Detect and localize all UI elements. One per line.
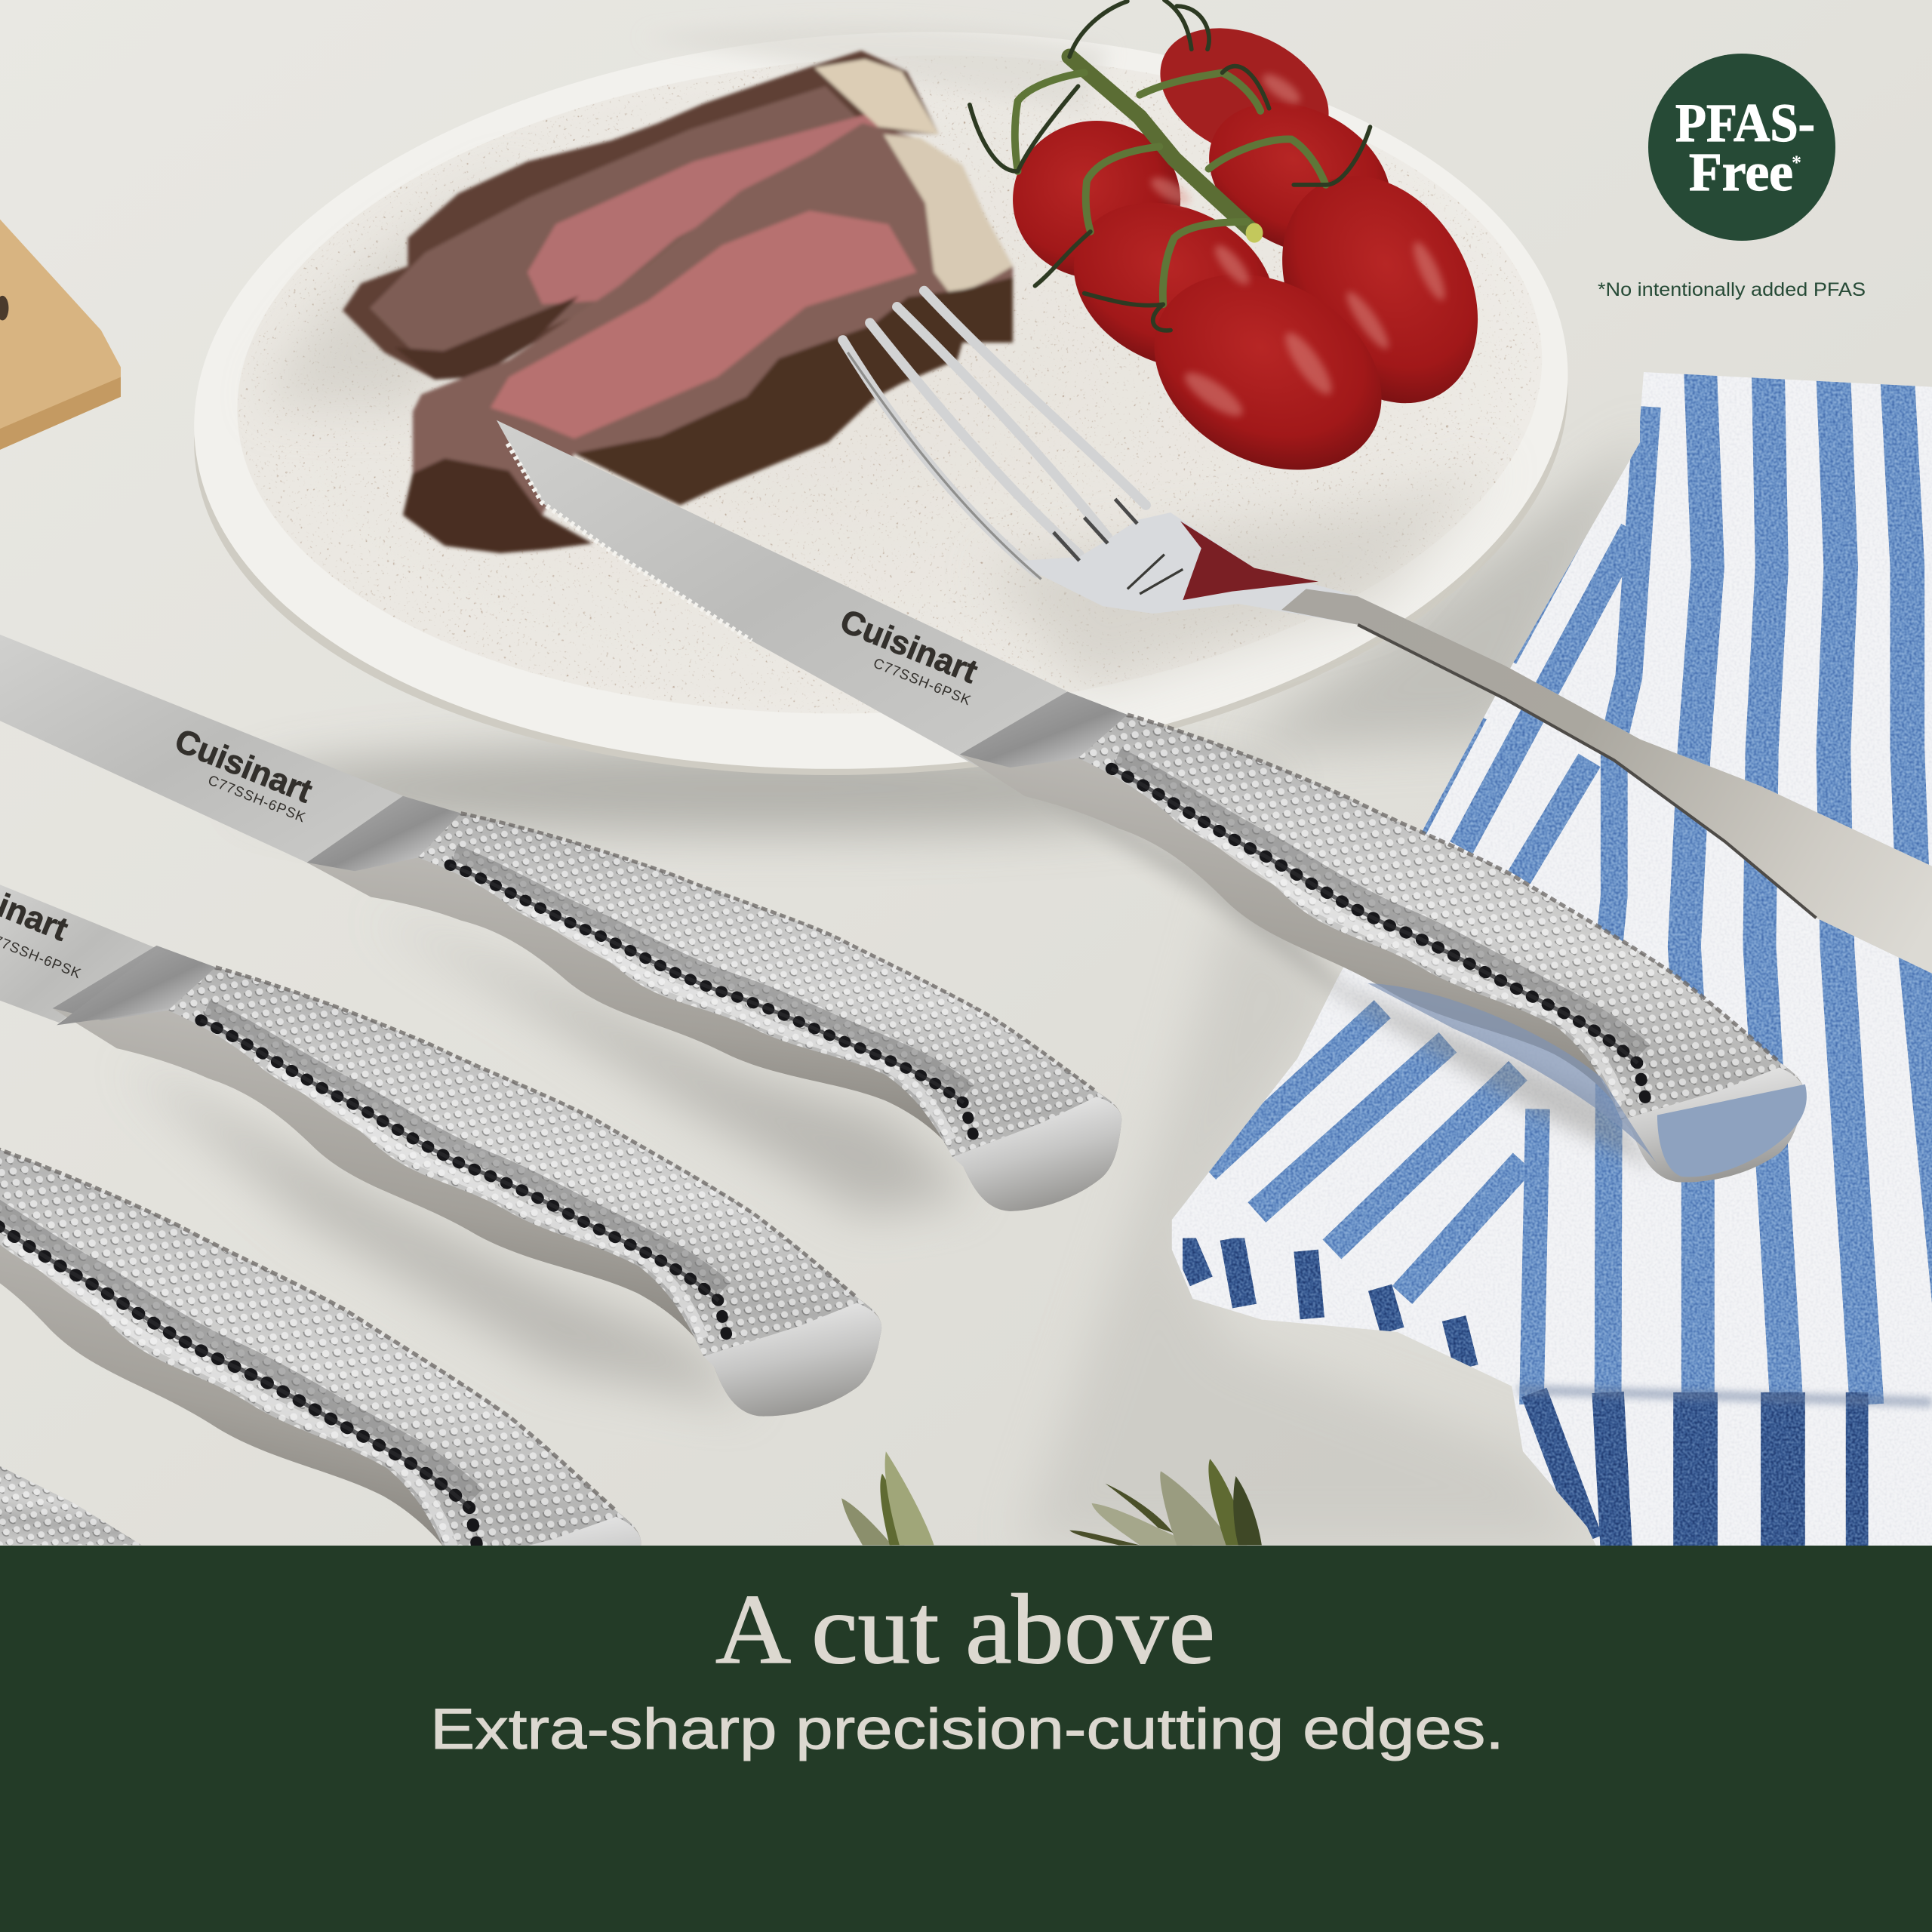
fork head and handle [1023,512,1932,974]
knife shadow [1035,789,1657,1171]
steak slices [343,51,1013,553]
rosemary sprigs [841,1451,1262,1545]
second knife [0,635,1121,1211]
badge text: Free [1689,142,1793,202]
handle [29,940,903,1423]
product photo scene [0,0,1932,1546]
title: A cut above [715,1574,1215,1684]
upper steak slice [343,51,939,380]
third knife [0,884,903,1423]
plate [175,0,1587,809]
towel dark lower fold stripes [1183,1238,1868,1552]
towel stripes [1208,370,1932,1404]
brand marking: Cuisinart [170,721,318,811]
lower steak slice [403,123,1013,553]
badge text [1675,93,1815,202]
brand marking: C77SSH-6PSK [206,772,309,826]
towel reflection on handle [1367,983,1657,1164]
fork [843,291,1932,974]
brand marking: Cuisinart [835,602,983,691]
tomato highlights [1147,69,1451,423]
knife on plate [497,420,1831,1191]
tomatoes on the vine [970,0,1517,509]
blade [0,884,158,1023]
bamboo block [0,220,121,450]
towel [1158,357,1932,1552]
fifth knife handle [0,1466,142,1545]
badge text: * [1792,152,1801,174]
fork tines [843,291,1146,573]
handle [931,684,1831,1191]
PFAS footnote: *No intentionally added PFAS [1598,279,1866,300]
brand marking: C77SSH-6PSK [871,655,974,709]
footer band [0,1546,1932,1932]
table shadows [123,431,1657,1545]
fork reflection [1180,521,1318,600]
subtitle: Extra-sharp precision-cutting edges. [430,1697,1504,1761]
badge text: PFAS- [1675,93,1815,153]
handle [307,796,1121,1211]
fourth knife handle [0,1097,678,1645]
vine [1069,57,1253,232]
PFAS-free badge [1648,54,1835,241]
blade [0,635,403,863]
blade [497,420,1067,767]
brand marking [0,887,84,982]
